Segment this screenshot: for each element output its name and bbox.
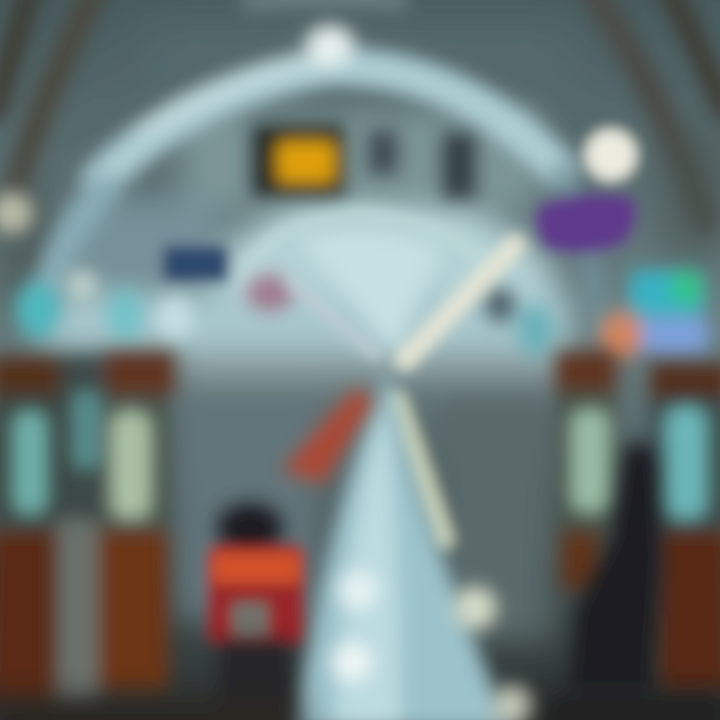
right gate windows: [570, 405, 708, 520]
white orb: [585, 129, 637, 181]
floor light path: [295, 370, 510, 720]
left wooden gates: [0, 350, 175, 700]
traveller with red backpack: [208, 502, 304, 710]
left gate windows: [12, 390, 152, 520]
inner arch: [240, 212, 490, 290]
head: [216, 502, 284, 554]
yellow sign: [274, 138, 338, 186]
purple sign: [535, 193, 636, 253]
red backpack: [208, 545, 304, 645]
right wooden gates: [555, 350, 720, 690]
navy sign: [163, 246, 229, 282]
floor shadow: [0, 695, 720, 720]
legs: [218, 640, 292, 710]
upper side shading: [0, 20, 720, 320]
right neon signs: [600, 270, 708, 358]
light cone above crossing: [300, 230, 440, 355]
ceiling ribs: [0, 0, 720, 220]
left teal lights: [16, 270, 553, 356]
crossing beams: [290, 245, 515, 540]
red diagonal banner: [282, 388, 375, 484]
central pale glow: [40, 110, 570, 640]
pink flag: [246, 274, 294, 312]
main arch: [45, 55, 600, 330]
left wall orb: [0, 193, 32, 233]
dark standing figure: [570, 441, 662, 690]
dark sign panels: [252, 125, 476, 200]
arch top glint: [306, 26, 354, 66]
floor light spots: [332, 570, 532, 720]
